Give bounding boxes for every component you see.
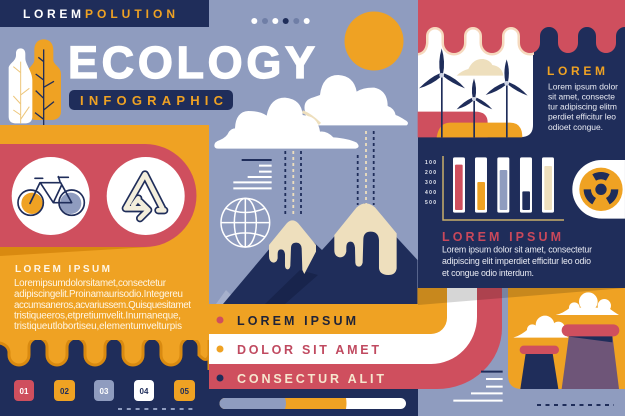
subtitle pill: INFOGRAPHIC	[80, 93, 224, 108]
panel: orange left	[0, 120, 209, 370]
text block: chart caption	[442, 230, 592, 278]
text block: lorem right: tur adipiscing elitm	[548, 102, 617, 112]
chimney: small	[520, 346, 559, 389]
sun	[344, 12, 404, 70]
number tiles: 05	[180, 387, 189, 396]
panel: navy right	[418, 0, 625, 288]
text block: left: tristiqueeros,etpretiumvelit.Inurnaneque,	[14, 310, 181, 322]
text block: left: tristiqueutlobortiseu,elementumvelturpis	[14, 321, 182, 332]
progress bar	[220, 398, 406, 409]
clouds	[214, 75, 408, 149]
legend band labels	[216, 314, 384, 386]
legend band labels: LOREM IPSUM	[237, 314, 356, 328]
bar chart: 100	[425, 160, 436, 166]
lines bottom right	[453, 372, 503, 401]
red pill with icons	[0, 144, 196, 247]
panel: chimneys	[513, 292, 619, 389]
number tiles: 01	[20, 387, 29, 396]
number tiles: 03	[100, 387, 109, 396]
text block: left	[14, 264, 191, 332]
text block: left: LOREM IPSUM	[15, 264, 110, 275]
navy base	[0, 335, 209, 416]
icon: recycling arrow	[126, 174, 164, 218]
bar chart	[425, 156, 564, 220]
bottom colour bands	[209, 288, 625, 416]
snow caps	[269, 203, 397, 275]
text block: lorem right	[547, 64, 618, 132]
legend band labels: CONSECTUR ALIT	[237, 372, 384, 386]
number tiles	[14, 380, 195, 401]
text block: lorem right: LOREM	[547, 64, 605, 78]
lines top left of globe	[233, 160, 272, 188]
text block: chart caption: adipiscing elit imperdiet efficitur leo odio	[442, 256, 591, 266]
top banner	[0, 0, 209, 27]
text block: lorem right: perdiet efficitur leo	[548, 112, 616, 122]
clouds	[513, 292, 619, 338]
legend band labels: DOLOR SIT AMET	[237, 343, 379, 357]
globe icon	[221, 198, 270, 247]
chimney: large	[562, 324, 619, 389]
bar chart: 200	[425, 170, 436, 176]
trees	[9, 39, 61, 125]
icon: turbines	[419, 48, 528, 137]
subtitle pill	[69, 90, 233, 110]
mountains	[216, 203, 418, 304]
wavy red top	[418, 0, 625, 53]
icon: bicycle	[18, 177, 84, 215]
text block: left: adipiscingelit.Proinamaurisodio.Integereu	[14, 289, 183, 300]
dashes	[118, 408, 196, 410]
bar chart: 400	[425, 190, 436, 196]
title: ECOLOGY	[68, 37, 315, 88]
icon: radiation	[572, 160, 625, 219]
top banner: LOREM	[23, 7, 81, 21]
text block: left: Loremipsumdolorsitamet,consectetur	[14, 278, 167, 289]
panel: wind farm	[418, 20, 533, 137]
text block: chart caption: Lorem ipsum dolor sit amet, consectetur	[442, 244, 592, 254]
dashes bottom right	[537, 404, 614, 406]
dotted lines	[285, 131, 374, 214]
top banner: POLUTION	[85, 7, 175, 21]
text block: lorem right: odioet congue.	[548, 122, 603, 132]
number tiles: 02	[60, 387, 69, 396]
text block: chart caption: et congue odio interdum.	[442, 268, 534, 278]
bar chart: 500	[425, 200, 436, 206]
text block: chart caption: LOREM IPSUM	[442, 230, 561, 244]
text block: left: accumsaneros,acvariussem.Quisquesitamet	[14, 300, 191, 311]
hills	[418, 48, 528, 137]
text block: lorem right: Lorem ipsum dolor	[548, 82, 618, 92]
dots row	[251, 18, 310, 24]
text block: lorem right: sit amet, consecte	[548, 92, 615, 102]
number tiles: 04	[140, 387, 149, 396]
bar chart: 300	[425, 180, 436, 186]
